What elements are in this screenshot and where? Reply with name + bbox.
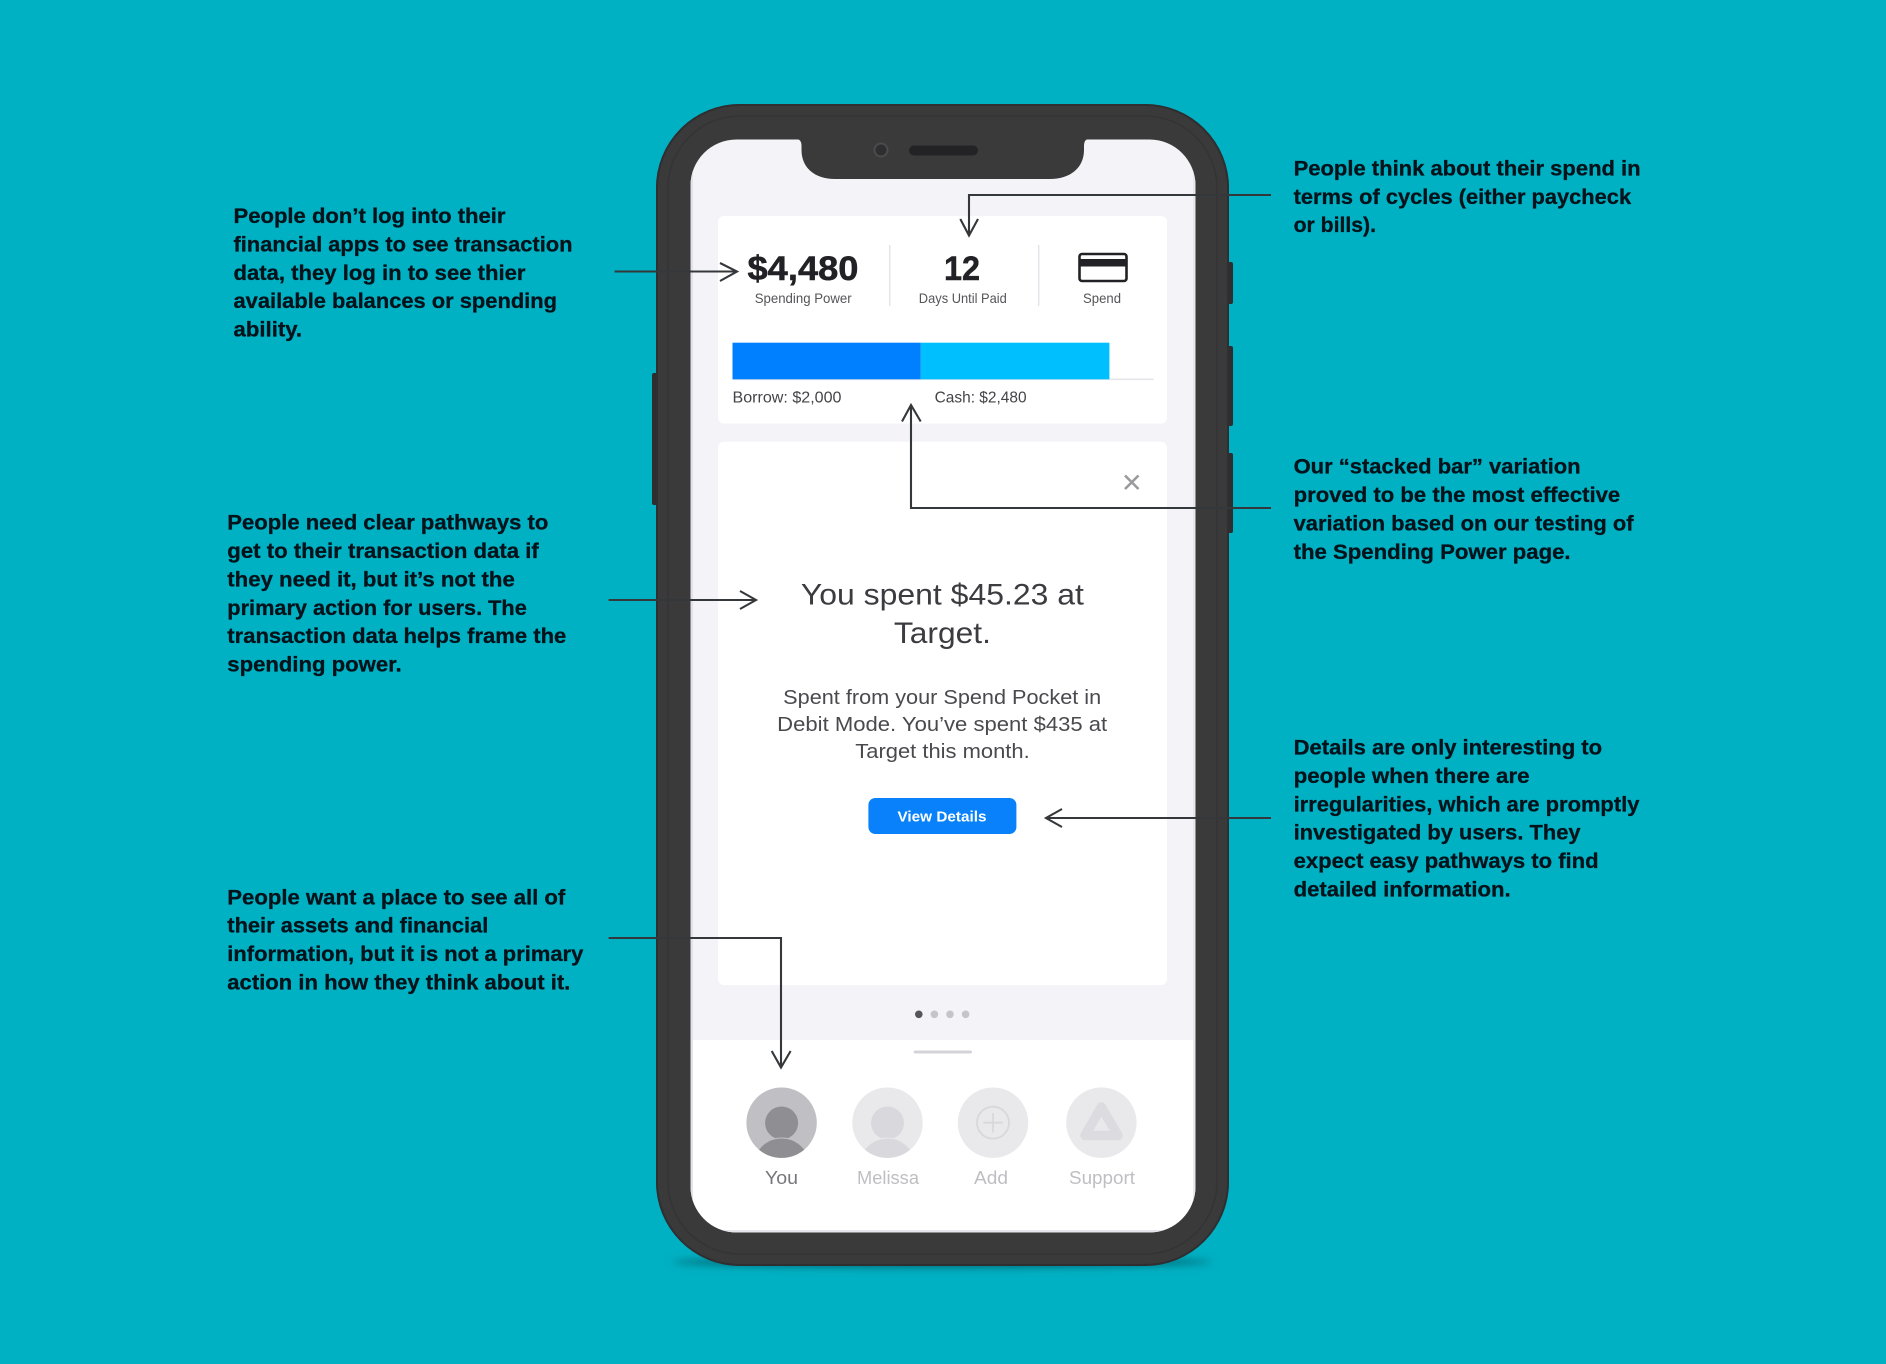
nav item: support: Support — [1069, 1168, 1135, 1188]
note: assets: their assets and financial — [227, 915, 488, 938]
note: details: people when there are — [1294, 765, 1530, 788]
card body text: Debit Mode. You’ve spent $435 at — [777, 713, 1108, 736]
phone body — [656, 104, 1229, 1266]
note: assets: People want a place to see all of — [227, 886, 566, 909]
note: cycles: terms of cycles (either paycheck — [1294, 186, 1631, 209]
note: pathways: get to their transaction data if — [227, 540, 540, 563]
note: balances: data, they log in to see thier — [234, 262, 526, 285]
icon: credit card — [1080, 254, 1126, 281]
days value: 12 — [944, 250, 980, 288]
card heading — [801, 578, 1085, 650]
note: stacked bar — [1294, 456, 1635, 564]
note: cycles: or bills). — [1294, 214, 1376, 237]
stacked bar chart — [732, 343, 1154, 380]
card body text — [777, 686, 1108, 763]
nav item: you — [746, 1088, 817, 1192]
note: details: detailed information. — [1294, 878, 1511, 902]
note: balances — [234, 205, 572, 342]
infographic canvas — [227, 104, 1640, 1272]
note: stacked bar: the Spending Power page. — [1294, 541, 1571, 564]
note: pathways: People need clear pathways to — [227, 512, 548, 535]
arrow: to days until paid — [960, 195, 1271, 236]
divider right — [1038, 245, 1039, 306]
borrow label: Borrow: $2,000 — [732, 390, 842, 406]
pagination dots — [915, 1010, 969, 1018]
note: cycles: People think about their spend in — [1294, 157, 1641, 180]
note: assets: action in how they think about it. — [227, 972, 570, 994]
camera — [874, 144, 888, 156]
note: stacked bar: proved to be the most effective — [1294, 484, 1620, 507]
side buttons — [652, 262, 1233, 533]
note: pathways: spending power. — [227, 654, 402, 677]
spend label: Spend — [1083, 290, 1121, 306]
phone — [652, 104, 1233, 1268]
button: view details: View Details — [898, 808, 986, 826]
note: details — [1294, 736, 1640, 902]
note: stacked bar: Our “stacked bar” variation — [1294, 456, 1581, 479]
note: balances: financial apps to see transaction — [234, 233, 572, 256]
screen — [690, 139, 1196, 1233]
nav item: melissa: Melissa — [857, 1168, 920, 1188]
note: balances: ability. — [234, 319, 302, 342]
nav item: melissa — [852, 1088, 923, 1192]
spending power label: Spending Power — [755, 290, 852, 306]
note: pathways — [227, 512, 566, 677]
note: stacked bar: variation based on our testing of — [1294, 512, 1635, 536]
note: pathways: they need it, but it’s not the — [227, 568, 515, 591]
spending power value: $4,480 — [748, 250, 858, 288]
notch — [796, 139, 1089, 179]
icon: close — [1125, 476, 1138, 489]
arrow: to spending power — [615, 263, 737, 281]
arrow: to view details — [1046, 809, 1271, 827]
note: details: irregularities, which are promptly — [1294, 793, 1640, 816]
note: balances: People don’t log into their — [234, 205, 506, 228]
arrow: to stacked bar — [902, 405, 1271, 508]
card heading: You spent $45.23 at — [801, 578, 1085, 612]
card body text: Spent from your Spend Pocket in — [783, 686, 1101, 709]
note: details: investigated by users. They — [1294, 822, 1581, 845]
nav item: support — [1066, 1088, 1137, 1188]
note: pathways: transaction data helps frame the — [227, 625, 566, 648]
nav item: add: Add — [974, 1168, 1008, 1188]
note: details: Details are only interesting to — [1294, 736, 1602, 760]
panel: spending power card — [718, 216, 1167, 424]
speaker — [909, 146, 978, 156]
note: details: expect easy pathways to find — [1294, 850, 1599, 873]
note: assets — [227, 886, 584, 994]
note: pathways: primary action for users. The — [227, 597, 527, 620]
days label: Days Until Paid — [919, 290, 1007, 306]
button: view details — [868, 798, 1016, 834]
note: assets: information, but it is not a primary — [227, 943, 584, 966]
arrow: to you tab — [609, 938, 791, 1068]
phone shadow — [672, 1256, 1212, 1268]
divider left — [889, 245, 890, 306]
cash label: Cash: $2,480 — [935, 390, 1027, 406]
nav item: add — [958, 1088, 1028, 1188]
drawer handle — [914, 1050, 972, 1054]
note: balances: available balances or spending — [234, 290, 557, 313]
nav item: you: You — [765, 1168, 798, 1188]
card heading: Target. — [894, 617, 991, 650]
card body text: Target this month. — [855, 740, 1030, 763]
note: cycles — [1294, 157, 1641, 237]
panel: transaction card — [718, 442, 1167, 985]
arrow: to transaction message — [609, 591, 756, 609]
